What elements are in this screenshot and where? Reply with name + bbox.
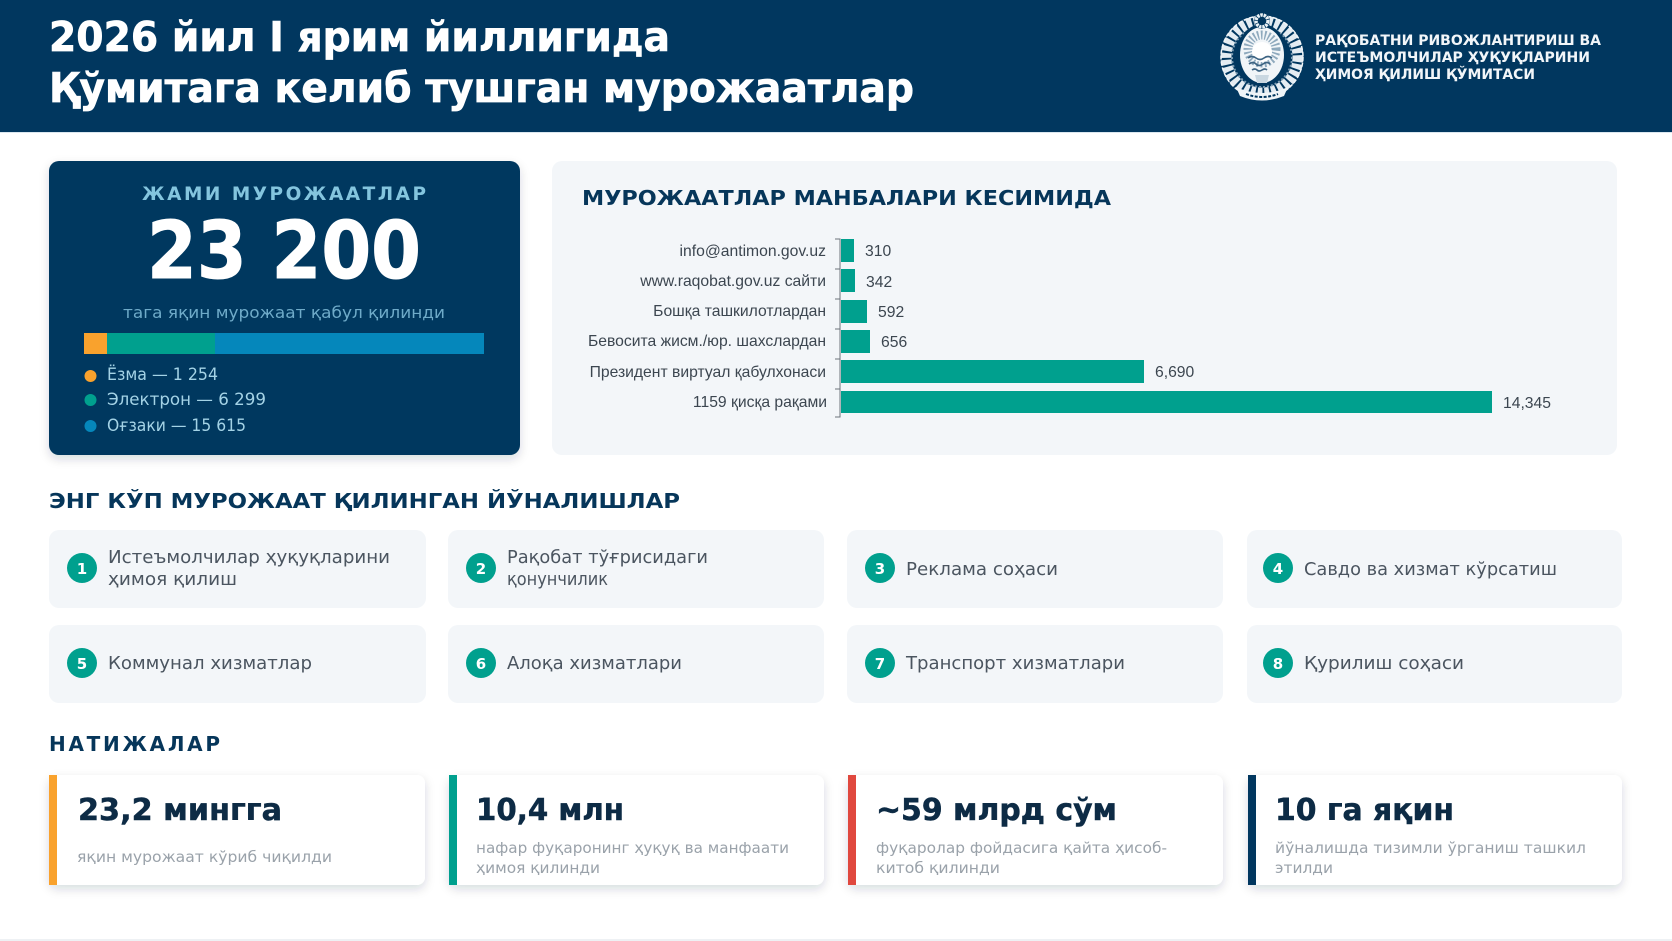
panel: direction 5 <box>49 625 426 703</box>
result card 3: китоб қилинди <box>876 859 1000 877</box>
title <box>49 13 914 112</box>
panel: sources <box>552 161 1617 455</box>
result card 2: 10,4 млн <box>476 793 624 828</box>
result card 2 <box>449 775 824 885</box>
result card 4: 10 га яқин <box>1275 793 1454 828</box>
heading: results: НАТИЖАЛАР <box>49 732 220 756</box>
result card 1: яқин мурожаат кўриб чиқилди <box>77 848 332 866</box>
panel: direction 3 <box>847 530 1223 608</box>
result card 4 <box>1248 775 1622 885</box>
panel: direction 7 <box>847 625 1223 703</box>
committee name: РАҚОБАТНИ РИВОЖЛАНТИРИШ ВА <box>1315 33 1602 49</box>
bar chart: Бевосита жисм./юр. шахслардан <box>588 333 826 350</box>
total heading: ЖАМИ МУРОЖААТЛАР <box>142 184 426 205</box>
committee name: ИСТЕЪМОЛЧИЛАР ҲУҚУҚЛАРИНИ <box>1315 50 1590 66</box>
panel: direction 5: 5 <box>77 655 87 673</box>
legend: Электрон — 6 299 <box>107 390 266 409</box>
title: 2026 йил I ярим йиллигида <box>49 13 670 61</box>
total number: 23 200 <box>147 205 421 297</box>
icon: state emblem <box>1221 13 1303 100</box>
total caption: тага яқин мурожаат қабул қилинди <box>123 303 445 322</box>
panel: direction 7: Транспорт хизматлари <box>905 653 1125 674</box>
sources heading: МУРОЖААТЛАР МАНБАЛАРИ КЕСИМИДА <box>582 186 1112 210</box>
title: Қўмитага келиб тушган мурожаатлар <box>49 64 914 112</box>
bar chart: 592 <box>878 304 904 321</box>
panel: direction 8 <box>1247 625 1622 703</box>
stacked bar <box>84 333 484 354</box>
panel: direction 6: 6 <box>476 655 486 673</box>
bar chart: 342 <box>866 274 892 291</box>
bar chart: www.raqobat.gov.uz сайти <box>639 273 826 290</box>
legend: Оғзаки — 15 615 <box>107 416 246 435</box>
panel: direction 1: Истеъмолчилар ҳуқуқларини <box>108 547 390 568</box>
panel: direction 1: ҳимоя қилиш <box>108 569 237 590</box>
committee name: ҲИМОЯ ҚИЛИШ ҚЎМИТАСИ <box>1315 66 1535 83</box>
result card 4: этилди <box>1275 859 1333 877</box>
heading: directions: ЭНГ КЎП МУРОЖААТ ҚИЛИНГАН ЙЎНАЛИШЛАР <box>49 489 680 513</box>
result card 3: ~59 млрд сўм <box>876 793 1117 828</box>
panel: direction 1: 1 <box>77 560 87 578</box>
panel: direction 7: 7 <box>875 655 885 673</box>
panel: direction 6 <box>448 625 824 703</box>
result card 1: 23,2 мингга <box>78 793 282 828</box>
result card 4: йўналишда тизимли ўрганиш ташкил <box>1275 839 1586 857</box>
panel: direction 6: Алоқа хизматлари <box>507 653 682 674</box>
panel: direction 3: Реклама соҳаси <box>906 559 1058 580</box>
bar chart: 1159 қисқа рақами <box>693 394 827 411</box>
result card 2: ҳимоя қилинди <box>476 859 600 877</box>
result card 1 <box>49 775 425 885</box>
result card 2: нафар фуқаронинг ҳуқуқ ва манфаати <box>476 839 789 857</box>
panel: total appeals <box>49 161 520 455</box>
panel: direction 1 <box>49 530 426 608</box>
result card 3: фуқаролар фойдасига қайта ҳисоб- <box>876 839 1167 857</box>
panel: direction 2 <box>448 530 824 608</box>
panel: direction 8: Қурилиш соҳаси <box>1304 653 1464 674</box>
bar chart: 6,690 <box>1155 364 1195 381</box>
panel: direction 4: 4 <box>1273 560 1283 578</box>
panel: direction 2: Рақобат тўғрисидаги <box>507 547 708 568</box>
bar chart: 310 <box>865 243 891 260</box>
bar chart: 14,345 <box>1503 395 1551 412</box>
bar chart: Президент виртуал қабулхонаси <box>590 364 826 381</box>
committee name <box>1315 33 1602 83</box>
header band <box>0 0 1672 133</box>
legend: Ёзма — 1 254 <box>107 365 218 384</box>
panel: direction 2: 2 <box>476 560 486 578</box>
bar chart: info@antimon.gov.uz <box>680 243 826 260</box>
bar chart: Бошқа ташкилотлардан <box>653 303 826 320</box>
result card 3 <box>848 775 1223 885</box>
panel: direction 3: 3 <box>875 560 885 578</box>
panel: direction 8: 8 <box>1273 655 1283 673</box>
panel: direction 4: Савдо ва хизмат кўрсатиш <box>1304 559 1557 580</box>
bar chart <box>588 239 1551 417</box>
bar chart: 656 <box>881 334 907 351</box>
panel: direction 5: Коммунал хизматлар <box>108 653 312 674</box>
legend <box>84 365 266 435</box>
panel: direction 4 <box>1247 530 1622 608</box>
panel: direction 2: қонунчилик <box>507 569 608 590</box>
